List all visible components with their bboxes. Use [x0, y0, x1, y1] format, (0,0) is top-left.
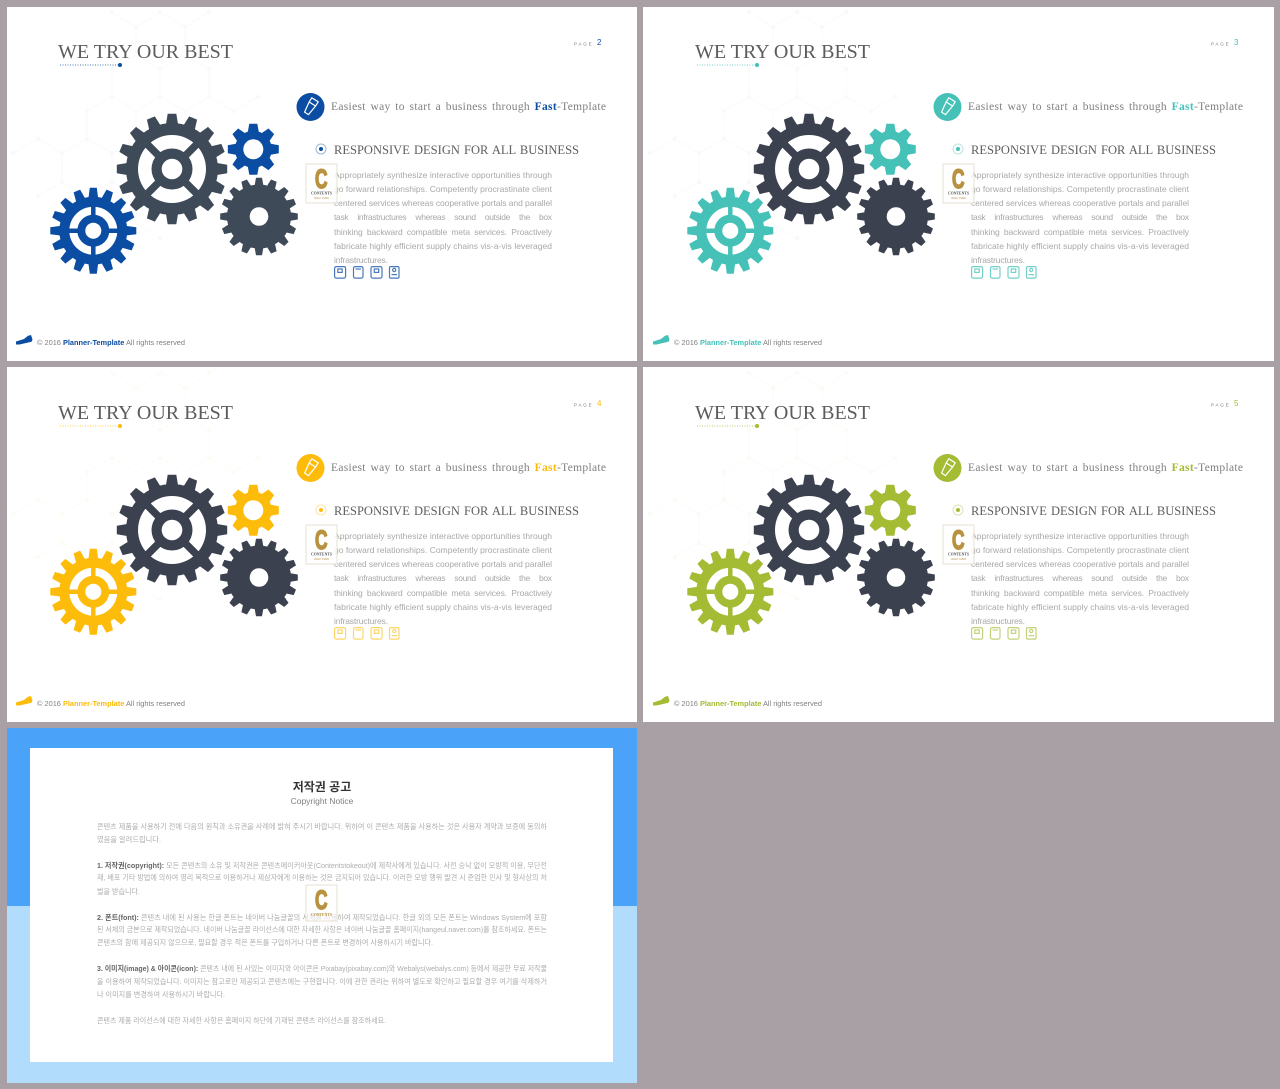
body text — [334, 170, 553, 265]
footer: © 2016 Planner-Template All rights reserved — [674, 338, 822, 347]
icons: books — [972, 628, 1036, 639]
body text: Appropriately synthesize interactive opportunities through — [971, 531, 1189, 541]
panel: blue slide page 2 — [7, 7, 637, 361]
icon: pen badge — [934, 454, 962, 482]
page number: PAGE — [574, 42, 593, 46]
icon: pen badge — [296, 454, 324, 482]
notice text: 콘텐츠의 함에 제공되지 않으므로, 필요할 경우 적은 폰트를 구입하거나 다른 폰트로 변경하여 사용하시기 바랍니다. — [97, 937, 433, 947]
footer: © 2016 Planner-Template All rights reserved — [674, 699, 822, 708]
heading: copyright notice: Copyright Notice — [291, 796, 354, 806]
logo badge: C — [315, 525, 328, 555]
body text: infrastructures. — [334, 255, 388, 265]
logo badge: WALK OVER — [951, 197, 966, 200]
body text — [971, 531, 1190, 626]
body text: Appropriately synthesize interactive opportunities through — [334, 170, 552, 180]
footer — [653, 696, 822, 708]
notice text — [97, 821, 547, 1025]
logo badge: C — [315, 164, 328, 194]
body text: task infrastructures whereas sound outside the box — [971, 212, 1190, 222]
page number: 4 — [597, 399, 602, 408]
icons: books — [972, 267, 1036, 278]
logo badge: C — [952, 525, 964, 555]
section heading: RESPONSIVE DESIGN FOR ALL BUSINESS — [971, 143, 1216, 157]
body text: task infrastructures whereas sound outside the box — [334, 212, 553, 222]
body text: centered services whereas cooperative portals and parallel — [971, 559, 1189, 569]
body text: infrastructures. — [971, 255, 1025, 265]
footer — [653, 335, 822, 347]
heading: copyright notice: 저작권 공고 — [293, 779, 351, 794]
gears — [50, 114, 298, 274]
body text: go forward relationships. Competently procrastinate client — [971, 545, 1190, 555]
logo badge: WALK OVER — [314, 197, 329, 200]
footer: © 2016 Planner-Template All rights reserved — [37, 699, 185, 708]
panel: yellow slide page 4 — [7, 367, 637, 722]
page number: PAGE — [1211, 402, 1230, 408]
body text: fabricate highly efficient supply chains vis-a-vis leveraged — [971, 602, 1189, 612]
logo badge: CONTENTS — [311, 912, 332, 917]
page number: PAGE — [1211, 42, 1230, 46]
icons: books — [335, 628, 399, 639]
body text: task infrastructures whereas sound outside the box — [971, 573, 1190, 583]
footer — [16, 696, 185, 708]
logo badge — [943, 164, 974, 203]
body text — [971, 170, 1190, 265]
body text: infrastructures. — [971, 616, 1025, 626]
page number — [574, 38, 602, 47]
page number: 3 — [1234, 38, 1239, 47]
icon: pen badge — [934, 93, 962, 121]
page number: 5 — [1234, 399, 1239, 408]
logo badge: C — [952, 164, 964, 194]
gears — [50, 475, 298, 635]
subtitle: Easiest way to start a business through Fast-Template — [331, 101, 606, 113]
logo badge — [943, 525, 974, 564]
title: WE TRY OUR BEST — [58, 41, 233, 63]
subtitle: Easiest way to start a business through Fast-Template — [331, 462, 606, 474]
logo badge — [306, 885, 337, 921]
subtitle: Easiest way to start a business through Fast-Template — [968, 101, 1243, 113]
body text: fabricate highly efficient supply chains vis-a-vis leveraged — [971, 241, 1189, 251]
logo badge: CONTENTS — [948, 552, 969, 556]
logo badge: WALK OVER — [951, 558, 966, 561]
logo badge — [306, 164, 337, 203]
body text — [334, 531, 553, 626]
section heading: RESPONSIVE DESIGN FOR ALL BUSINESS — [971, 504, 1216, 518]
title: WE TRY OUR BEST — [58, 402, 233, 424]
notice text: 콘텐츠 제품 라이선스에 대한 자세한 사항은 홈페이지 하단에 기재된 콘텐츠 라이선스를 참조하세요. — [97, 1015, 386, 1025]
section heading: RESPONSIVE DESIGN FOR ALL BUSINESS — [334, 143, 579, 157]
notice text: 재, 배포 기타 방법에 의하여 영리 목적으로 이용하거나 제삼자에게 이용하는 것은 금지되어 있습니다. 이러한 모방 행위 발견 시 준엄한 민사 및 형사상의 처 — [97, 872, 547, 882]
panel: green slide page 5 — [643, 367, 1274, 722]
footer: © 2016 Planner-Template All rights reserved — [37, 338, 185, 347]
body text: thinking backward compatible meta services. Proactively — [334, 227, 553, 237]
notice text: 3. 이미지(image) & 아이콘(icon): 콘텐츠 내에 된 사있는 이미지와 아이콘은 Pixabay(pixabay.com)와 Webalys(webalys.com) 등에서 제공한 무료 저작물 — [97, 963, 547, 973]
body text: infrastructures. — [334, 616, 388, 626]
gears — [687, 114, 935, 274]
title: WE TRY OUR BEST — [695, 402, 870, 424]
body text: centered services whereas cooperative portals and parallel — [334, 198, 552, 208]
body text: Appropriately synthesize interactive opportunities through — [971, 170, 1189, 180]
notice text: 벌을 받습니다. — [97, 886, 140, 896]
heading: copyright notice — [291, 779, 354, 806]
title: WE TRY OUR BEST — [695, 41, 870, 63]
body text: go forward relationships. Competently procrastinate client — [971, 184, 1190, 194]
logo badge: WALK OVER — [314, 558, 329, 561]
body text: task infrastructures whereas sound outside the box — [334, 573, 553, 583]
panel: teal slide page 3 — [643, 7, 1274, 361]
body text: go forward relationships. Competently procrastinate client — [334, 184, 553, 194]
page number — [1211, 399, 1239, 408]
logo badge: CONTENTS — [311, 190, 332, 196]
page number — [1211, 38, 1239, 47]
icons: books — [335, 267, 399, 278]
body text: thinking backward compatible meta services. Proactively — [334, 588, 553, 598]
notice text: 1. 저작권(copyright): 모든 콘텐츠의 소유 및 저작권은 콘텐츠메이커아웃(Contentstokeout)에 제작사에게 있습니다. 사전 승낙 없이 모방적 이용, 무단전 — [97, 860, 547, 870]
logo badge: C — [315, 885, 328, 915]
logo badge: CONTENTS — [948, 190, 969, 196]
logo badge — [306, 525, 337, 564]
icon: pen badge — [296, 93, 324, 121]
section heading: RESPONSIVE DESIGN FOR ALL BUSINESS — [334, 504, 579, 518]
notice text: 을 이용하여 제작되었습니다. 이미지는 참고로만 제공되고 콘텐츠에는 구현합니다. 이에 관한 권리는 위하여 별도로 확인하고 필요할 경우 여기를 삭제하거 — [97, 976, 547, 986]
page number — [574, 399, 602, 408]
notice text: 나 이미지를 변경하여 사용하시기 바랍니다. — [97, 989, 225, 999]
body text: fabricate highly efficient supply chains vis-a-vis leveraged — [334, 602, 552, 612]
body text: centered services whereas cooperative portals and parallel — [334, 559, 552, 569]
body text: go forward relationships. Competently procrastinate client — [334, 545, 553, 555]
subtitle: Easiest way to start a business through Fast-Template — [968, 462, 1243, 474]
notice text: 콘텐츠 제품을 사용하기 전에 다음의 원칙과 소유권을 사례에 밝혀 주시기 바랍니다. 위하여 이 콘텐츠 제품을 사용하는 것은 사용자 계약과 보증에 동의하 — [97, 821, 547, 831]
page number: 2 — [597, 38, 602, 47]
body text: fabricate highly efficient supply chains vis-a-vis leveraged — [334, 241, 552, 251]
body text: Appropriately synthesize interactive opportunities through — [334, 531, 552, 541]
panel: copyright notice — [7, 728, 637, 1083]
body text: centered services whereas cooperative portals and parallel — [971, 198, 1189, 208]
logo badge: CONTENTS — [311, 552, 332, 556]
gears — [687, 475, 935, 635]
body text: thinking backward compatible meta services. Proactively — [971, 588, 1190, 598]
body text: thinking backward compatible meta services. Proactively — [971, 227, 1190, 237]
page number: PAGE — [574, 402, 593, 408]
notice text: 된 서체의 금본으로 제작되었습니다. 네이버 나눔글꼴 라이선스에 대한 자세한 사항은 네이버 나눔글꼴 홈페이지(hangeul.naver.com)를 참조하세요. 폰트는 — [97, 924, 547, 934]
footer — [16, 335, 185, 347]
notice text: 2. 폰트(font): 콘텐츠 내에 된 사용는 한글 폰트는 네이버 나눔글꼴의 서체를 사용하여 제작되었습니다. 한글 외의 모든 폰트는 Windows System에 포함 — [97, 912, 547, 922]
notice text: 였음을 알려드립니다. — [97, 834, 161, 844]
